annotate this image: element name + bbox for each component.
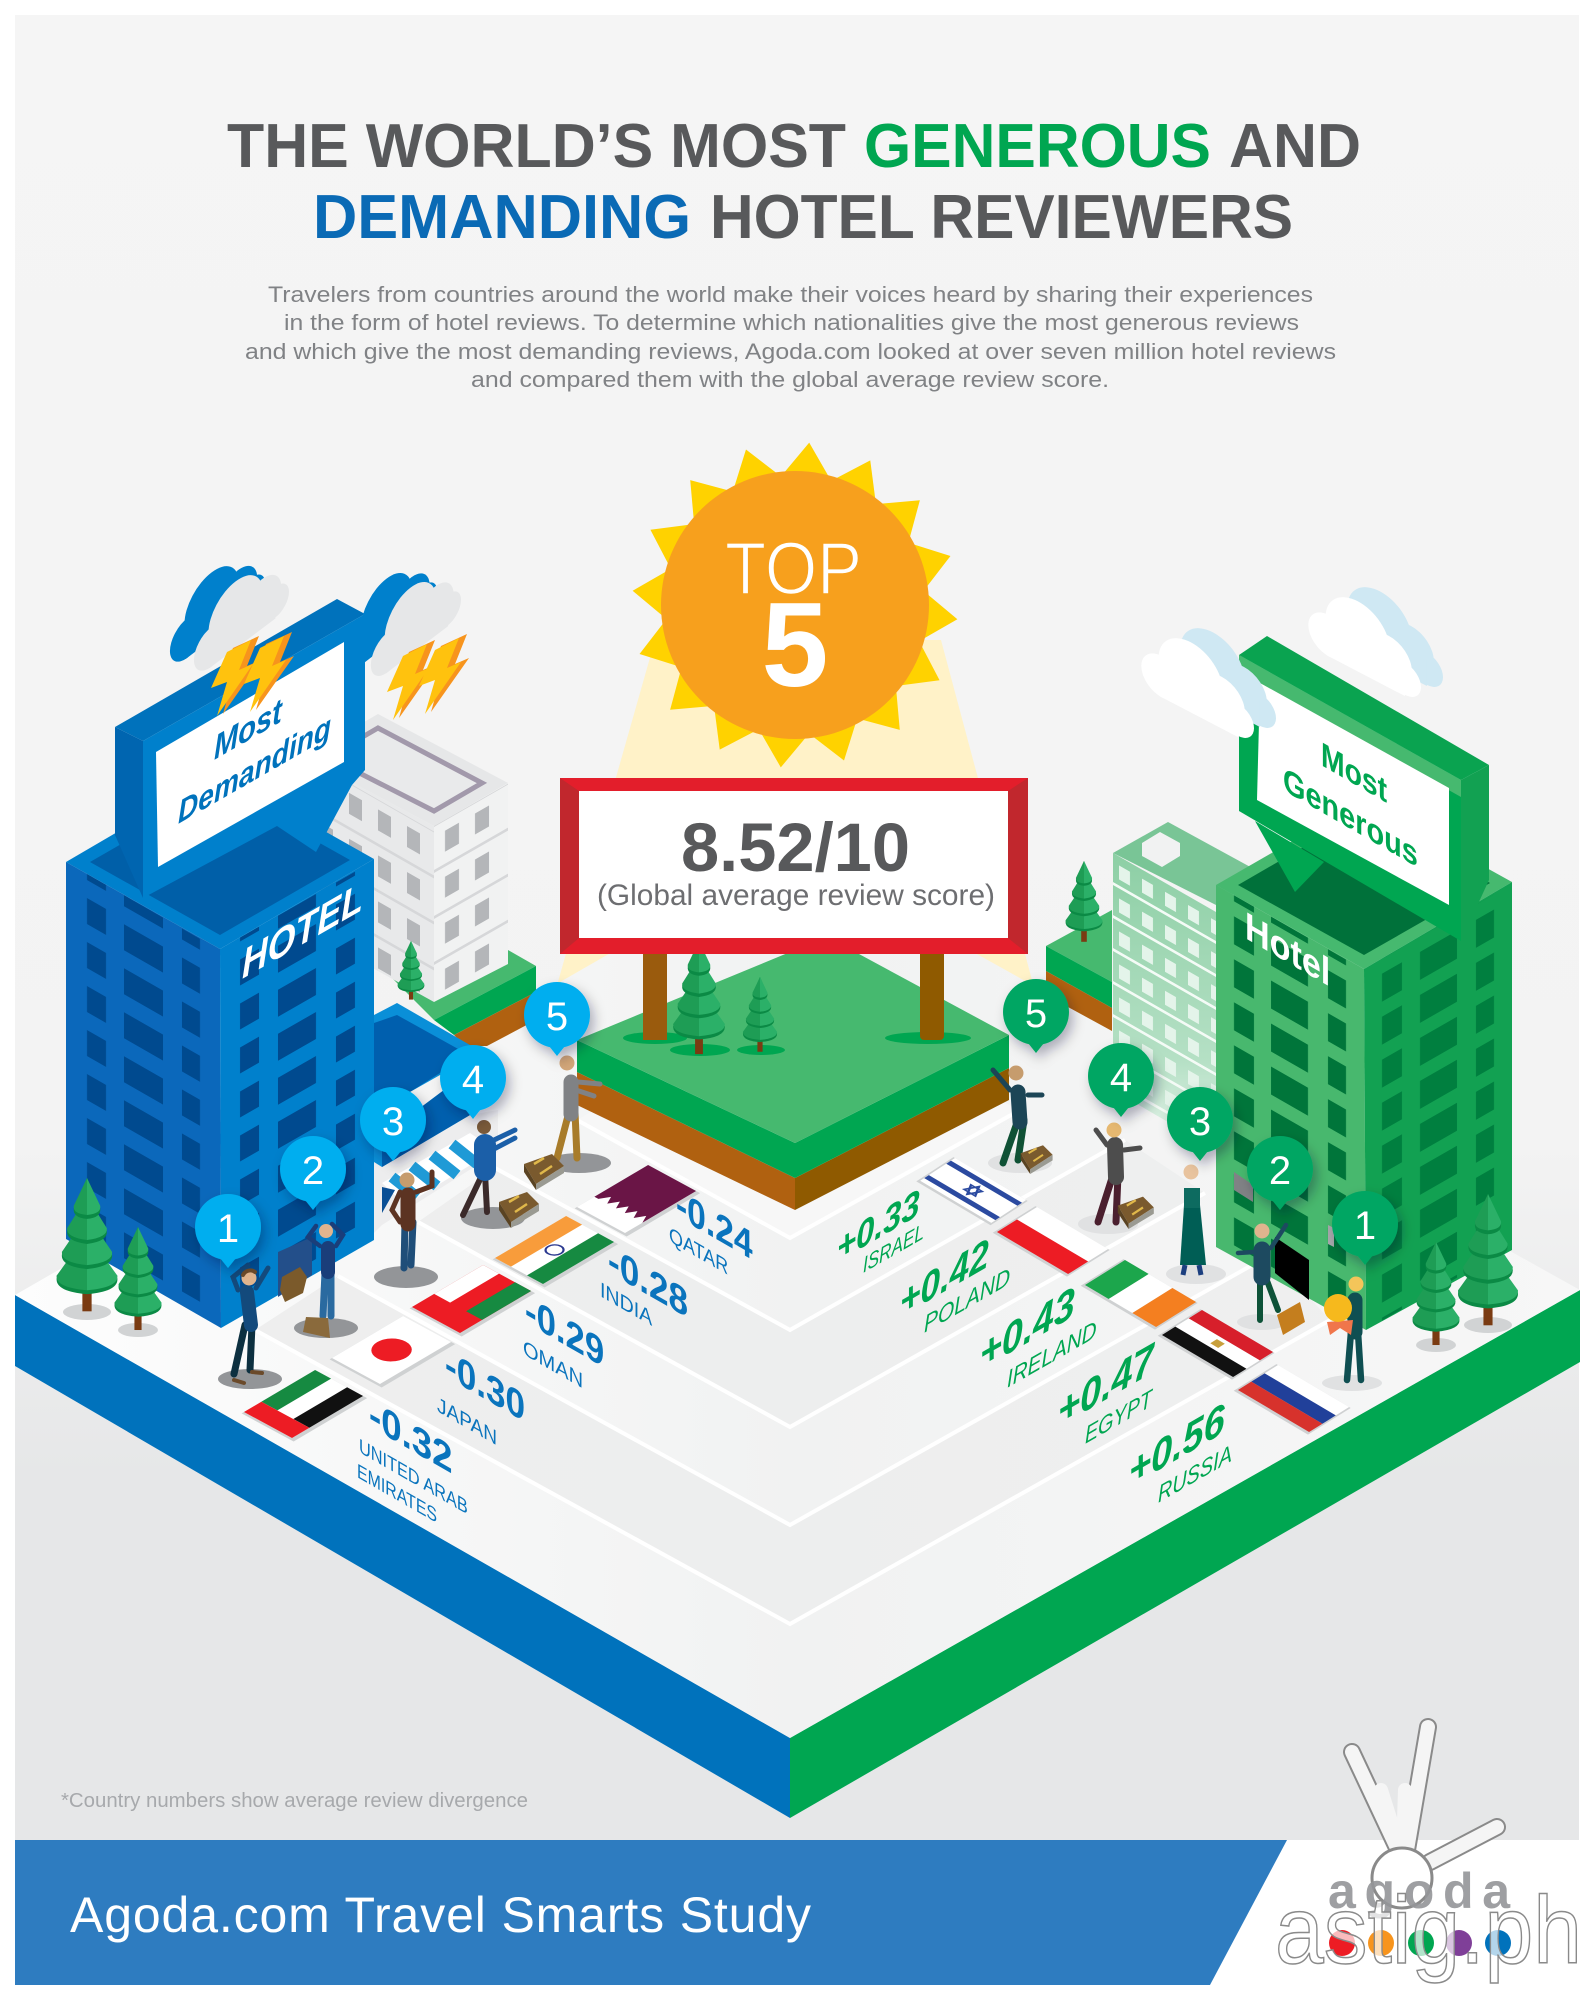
person: green 4 (1078, 1122, 1140, 1234)
small lawn right (1046, 910, 1112, 1031)
pin: green 4 (1088, 1043, 1154, 1117)
score: Qatar: QATAR (669, 1223, 728, 1280)
flag: Japan (330, 1316, 455, 1388)
tree: central small (737, 977, 785, 1055)
score: Oman: -0.29 (525, 1287, 604, 1376)
most generous sign (1239, 636, 1489, 941)
score: Russia: RUSSIA (1158, 1440, 1232, 1509)
suitcase: blue 5 (524, 1154, 564, 1190)
score: Israel: +0.33 (837, 1182, 920, 1271)
person: green 1 with medal (1322, 1276, 1382, 1391)
pin: green 5 (1003, 979, 1069, 1053)
person: blue 3 (374, 1172, 438, 1288)
title (227, 112, 1361, 252)
most demanding sign: Demanding (178, 707, 331, 831)
pin: blue 2: 2 (302, 1149, 324, 1193)
cloud left 2 (347, 540, 461, 685)
pin: green 3 (1167, 1087, 1233, 1161)
pin: green 4: 4 (1110, 1056, 1132, 1100)
pin: blue 4: 4 (462, 1058, 484, 1102)
title: AND (1229, 112, 1361, 181)
hotel sign text: HOTEL (242, 873, 363, 988)
intro text: Travelers from countries around the world make their voices heard by sharing their experiences (268, 282, 1313, 307)
intro text (245, 282, 1336, 392)
pin: blue 4 (440, 1045, 506, 1119)
agoda logo and watermark (1275, 1727, 1582, 1984)
suitcase: green 2 (1277, 1302, 1305, 1335)
pin: green 2 (1247, 1136, 1313, 1210)
most generous sign: Generous (1283, 760, 1418, 875)
sun badge (630, 440, 960, 770)
score: Poland: POLAND (924, 1263, 1010, 1339)
title: THE WORLD’S MOST (227, 112, 846, 181)
flag: Russia (1234, 1364, 1351, 1435)
pin: blue 1: 1 (217, 1207, 239, 1251)
title: HOTEL REVIEWERS (710, 183, 1293, 252)
footer banner: Agoda.com Travel Smarts Study (70, 1887, 811, 1943)
pin: blue 5 (524, 982, 590, 1056)
scores: most generous (837, 1182, 1232, 1509)
score: Japan: JAPAN (437, 1393, 497, 1450)
intro text: in the form of hotel reviews. To determine which nationalities give the most generous reviews (284, 310, 1299, 335)
pin: blue 2 (280, 1136, 346, 1210)
score: India: INDIA (600, 1278, 652, 1331)
suitcase: green 4 (1118, 1197, 1154, 1229)
isometric platform (15, 850, 1580, 1818)
green hotel building (1216, 800, 1512, 1333)
trees left (57, 1178, 162, 1337)
most generous sign: Most (1321, 735, 1387, 811)
cloud right 1 (1141, 606, 1276, 745)
flag: India (493, 1216, 618, 1288)
score: UAE (357, 1391, 468, 1528)
mint building behind green hotel (1113, 822, 1265, 1150)
score: Qatar: -0.24 (676, 1181, 753, 1269)
cloud left 1 (170, 532, 289, 680)
lightning bolts under left cloud 2 (387, 634, 469, 720)
billboard (560, 778, 1028, 954)
flag: Egypt (1158, 1309, 1275, 1380)
scores: most demanding (357, 1181, 753, 1528)
pin: green 5: 5 (1025, 992, 1047, 1036)
score: Oman: OMAN (523, 1336, 583, 1393)
flag: Poland (993, 1206, 1110, 1277)
blue hotel building (66, 772, 374, 1328)
score: UAE: -0.32 (369, 1391, 453, 1483)
person: blue 1 (218, 1265, 282, 1389)
light beam from sun (550, 640, 1040, 1010)
score: Japan: -0.30 (445, 1341, 525, 1431)
footer banner (15, 1840, 1287, 1985)
bag: blue 2 (303, 1317, 330, 1338)
trees right (1412, 1194, 1518, 1352)
suitcase: blue 1 (280, 1267, 307, 1302)
score: Egypt: +0.47 (1058, 1333, 1155, 1437)
intro text: and compared them with the global average review score. (471, 367, 1109, 392)
person: blue 5 (547, 1056, 611, 1173)
tree: behind left (398, 941, 424, 1000)
score: UAE: UNITED ARAB (359, 1435, 468, 1519)
score: Israel: ISRAEL (863, 1218, 924, 1278)
person: blue 2 (294, 1224, 358, 1338)
pin: blue 1 (195, 1194, 261, 1268)
suitcase: green 5 (1021, 1145, 1053, 1174)
suitcase: blue 4 (499, 1192, 539, 1228)
cloud right 2 (1308, 566, 1443, 704)
pin: green 3: 3 (1189, 1100, 1211, 1144)
grey building behind blue hotel (304, 714, 508, 1003)
central green island (577, 950, 1009, 1210)
score: Russia: +0.56 (1129, 1394, 1226, 1497)
person: blue 4 (461, 1120, 525, 1229)
tree: central large (670, 941, 730, 1056)
pin: green 1: 1 (1354, 1204, 1376, 1248)
person: green 2 (1237, 1224, 1287, 1330)
most demanding sign: Most (214, 690, 283, 768)
agoda logo and watermark: agoda (1328, 1863, 1511, 1919)
flag: UAE (242, 1370, 367, 1442)
score: Ireland: +0.43 (980, 1278, 1075, 1380)
pin: blue 3: 3 (382, 1100, 404, 1144)
title: DEMANDING (313, 183, 691, 252)
most demanding sign (115, 599, 365, 898)
sun badge: TOP (725, 527, 862, 610)
flag: Ireland (1081, 1259, 1198, 1330)
person: green 3 woman (1166, 1164, 1226, 1284)
pin: blue 5: 5 (546, 995, 568, 1039)
score: Egypt: EGYPT (1085, 1383, 1154, 1450)
billboard: 8.52/10 (681, 809, 910, 886)
footnote: *Country numbers show average review divergence (61, 1790, 528, 1812)
flag: Oman (410, 1265, 535, 1337)
intro text: and which give the most demanding reviews, Agoda.com looked at over seven million hotel reviews (245, 339, 1336, 364)
lightning bolts under left cloud 1 (211, 632, 294, 716)
pin: green 1 (1332, 1191, 1398, 1265)
tree: behind right (1066, 861, 1102, 942)
pin: blue 3 (360, 1087, 426, 1161)
hotel sign text: Hotel (1245, 904, 1330, 996)
billboard: (Global average review score) (597, 879, 995, 912)
score: UAE: EMIRATES (357, 1460, 437, 1528)
small green lawn left (375, 900, 536, 1046)
score: India: -0.28 (608, 1237, 688, 1327)
flag: Israel (916, 1157, 1028, 1225)
billboard posts (623, 950, 971, 1044)
score: Ireland: IRELAND (1007, 1316, 1097, 1394)
score: Poland: +0.42 (900, 1229, 989, 1326)
blue annex with striped awning (374, 1003, 498, 1233)
sun badge: 5 (762, 578, 828, 712)
pin: green 2: 2 (1269, 1149, 1291, 1193)
flag: Qatar (575, 1165, 700, 1237)
title: GENEROUS (864, 112, 1211, 181)
person: green 5 (988, 1066, 1052, 1173)
